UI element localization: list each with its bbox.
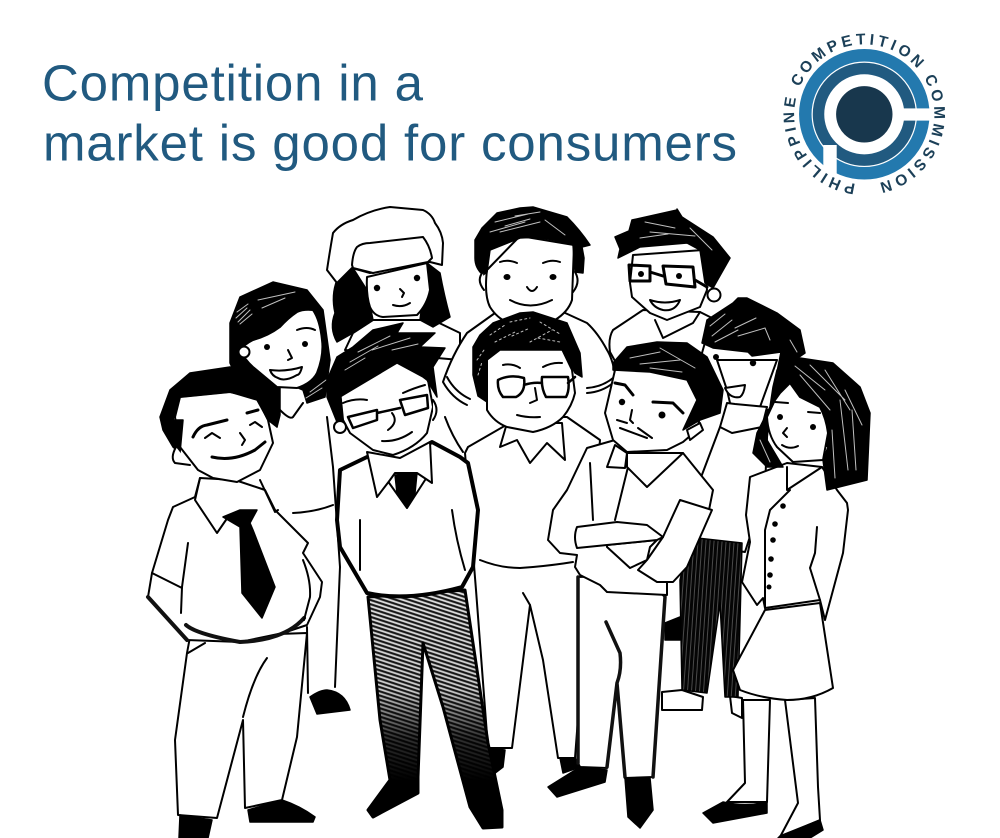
title [42,55,737,172]
person: man with glasses at back right [609,209,730,370]
necktie knot [395,473,417,508]
dark trousers [368,590,502,828]
illustration: group of ten people [148,207,870,838]
black trousers [680,537,742,697]
logo: Philippine Competition Commission [783,34,946,194]
title: market is good for consumers [43,115,737,172]
black necktie [223,510,275,618]
person: man with spiky hair, glasses and sweater vest [327,323,502,828]
person: man with curly hair and round glasses [465,312,600,777]
person: smiling man with black tie [148,367,322,838]
person: woman with bob haircut in jacket and skirt [703,358,870,838]
person: girl with beret [327,207,460,360]
title: Competition in a [42,55,424,112]
person: man at centre back [443,207,615,452]
person: man with crossed arms [548,342,723,828]
person: man with swept hair behind bob woman [662,298,805,718]
person: woman with long dark hair [230,282,350,714]
